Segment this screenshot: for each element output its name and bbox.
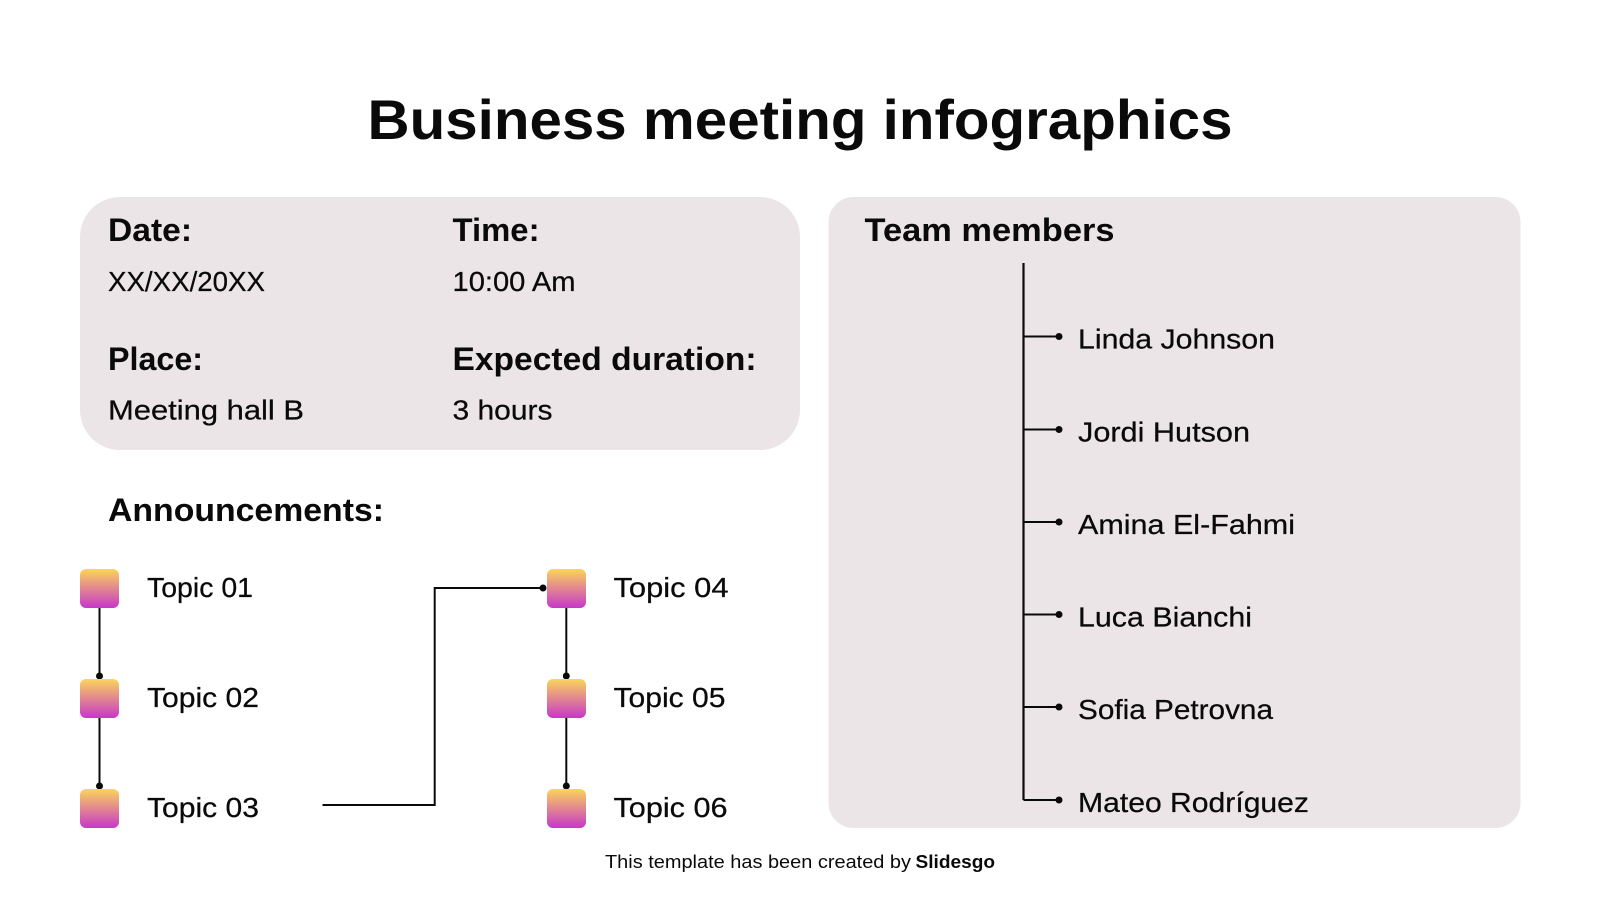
member: Mateo Rodríguez: Mateo Rodríguez <box>1078 787 1309 818</box>
time block: Time: <box>452 212 540 248</box>
footer credit: This template has been created by <box>605 852 911 872</box>
expected duration block: 3 hours <box>452 394 552 426</box>
topic 01: Topic 01 <box>147 572 253 603</box>
time block: 10:00 Am <box>452 266 576 297</box>
heading: announcements: Announcements: <box>108 492 384 528</box>
topic 05 <box>547 679 726 718</box>
topic 03: Topic 03 <box>147 792 259 823</box>
place block: Place: <box>108 341 203 377</box>
topic 02 <box>80 679 259 718</box>
team tree trunk <box>1022 263 1025 800</box>
connector: topic 04 to 05 <box>563 608 570 680</box>
topic 06: Topic 06 <box>614 792 728 823</box>
panel: team members <box>828 197 1520 828</box>
member: Sofia Petrovna: Sofia Petrovna <box>1078 694 1273 725</box>
member: Luca Bianchi: Luca Bianchi <box>1078 602 1252 632</box>
expected duration block: Expected duration: <box>452 341 756 377</box>
date block <box>108 212 265 297</box>
topic 03 <box>80 789 259 828</box>
connector: topic 02 to 03 <box>96 718 103 790</box>
announcements flow <box>80 569 728 828</box>
topic 04: Topic 04 <box>614 572 728 603</box>
footer credit: Slidesgo <box>916 852 995 872</box>
expected duration block <box>452 341 756 426</box>
topic 05: Topic 05 <box>614 682 726 713</box>
member: Linda Johnson: Linda Johnson <box>1078 324 1275 354</box>
topic 02: Topic 02 <box>147 682 259 713</box>
member: Jordi Hutson <box>1024 416 1250 448</box>
topic 01 <box>80 569 253 608</box>
heading: team members: Team members <box>864 212 1114 248</box>
member: Jordi Hutson: Jordi Hutson <box>1078 416 1250 448</box>
date block: Date: <box>108 212 192 248</box>
connector: topic 05 to 06 <box>563 718 570 790</box>
topic 04 <box>547 569 728 608</box>
place block <box>108 341 304 426</box>
date block: XX/XX/20XX <box>108 266 265 297</box>
connector: topic 01 to 02 <box>96 608 103 680</box>
topic 06 <box>547 789 728 828</box>
place block: Meeting hall B <box>108 394 304 426</box>
connector: topic 03 to 04 <box>322 584 546 805</box>
member: Amina El-Fahmi: Amina El-Fahmi <box>1078 509 1295 540</box>
time block <box>452 212 576 297</box>
title: Business meeting infographics <box>368 88 1232 151</box>
panel: meeting details <box>80 197 800 450</box>
